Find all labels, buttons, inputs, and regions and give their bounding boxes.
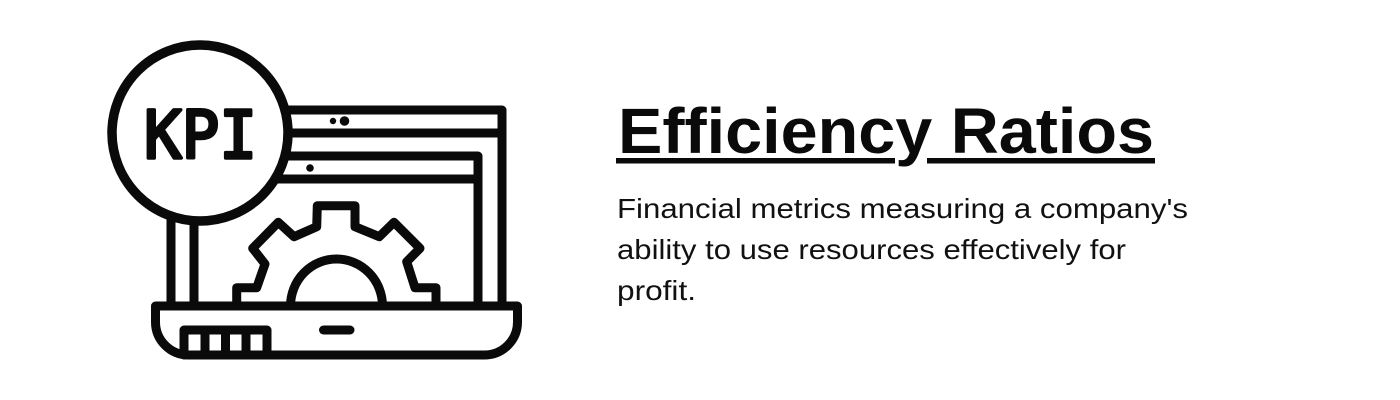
- gear: [237, 206, 436, 306]
- KPI label: KPI: [144, 97, 257, 174]
- magnifier handle: [171, 220, 194, 306]
- description text: Financial metrics measuring a company's: [617, 193, 1188, 224]
- laptop keyboard ports: [184, 330, 267, 355]
- description text: ability to use resources effectively for: [617, 234, 1126, 265]
- KPI magnifier circle: [112, 45, 288, 221]
- gear centre arch: [290, 259, 382, 306]
- back browser window: [284, 110, 502, 306]
- description text: [617, 193, 1188, 306]
- heading: Efficiency Ratios: [618, 95, 1154, 167]
- front browser window: [268, 156, 478, 306]
- icon: KPI laptop with gear: [112, 45, 518, 355]
- laptop base: [156, 306, 518, 355]
- description text: profit.: [617, 275, 696, 306]
- laptop trackpad slot: [324, 326, 350, 334]
